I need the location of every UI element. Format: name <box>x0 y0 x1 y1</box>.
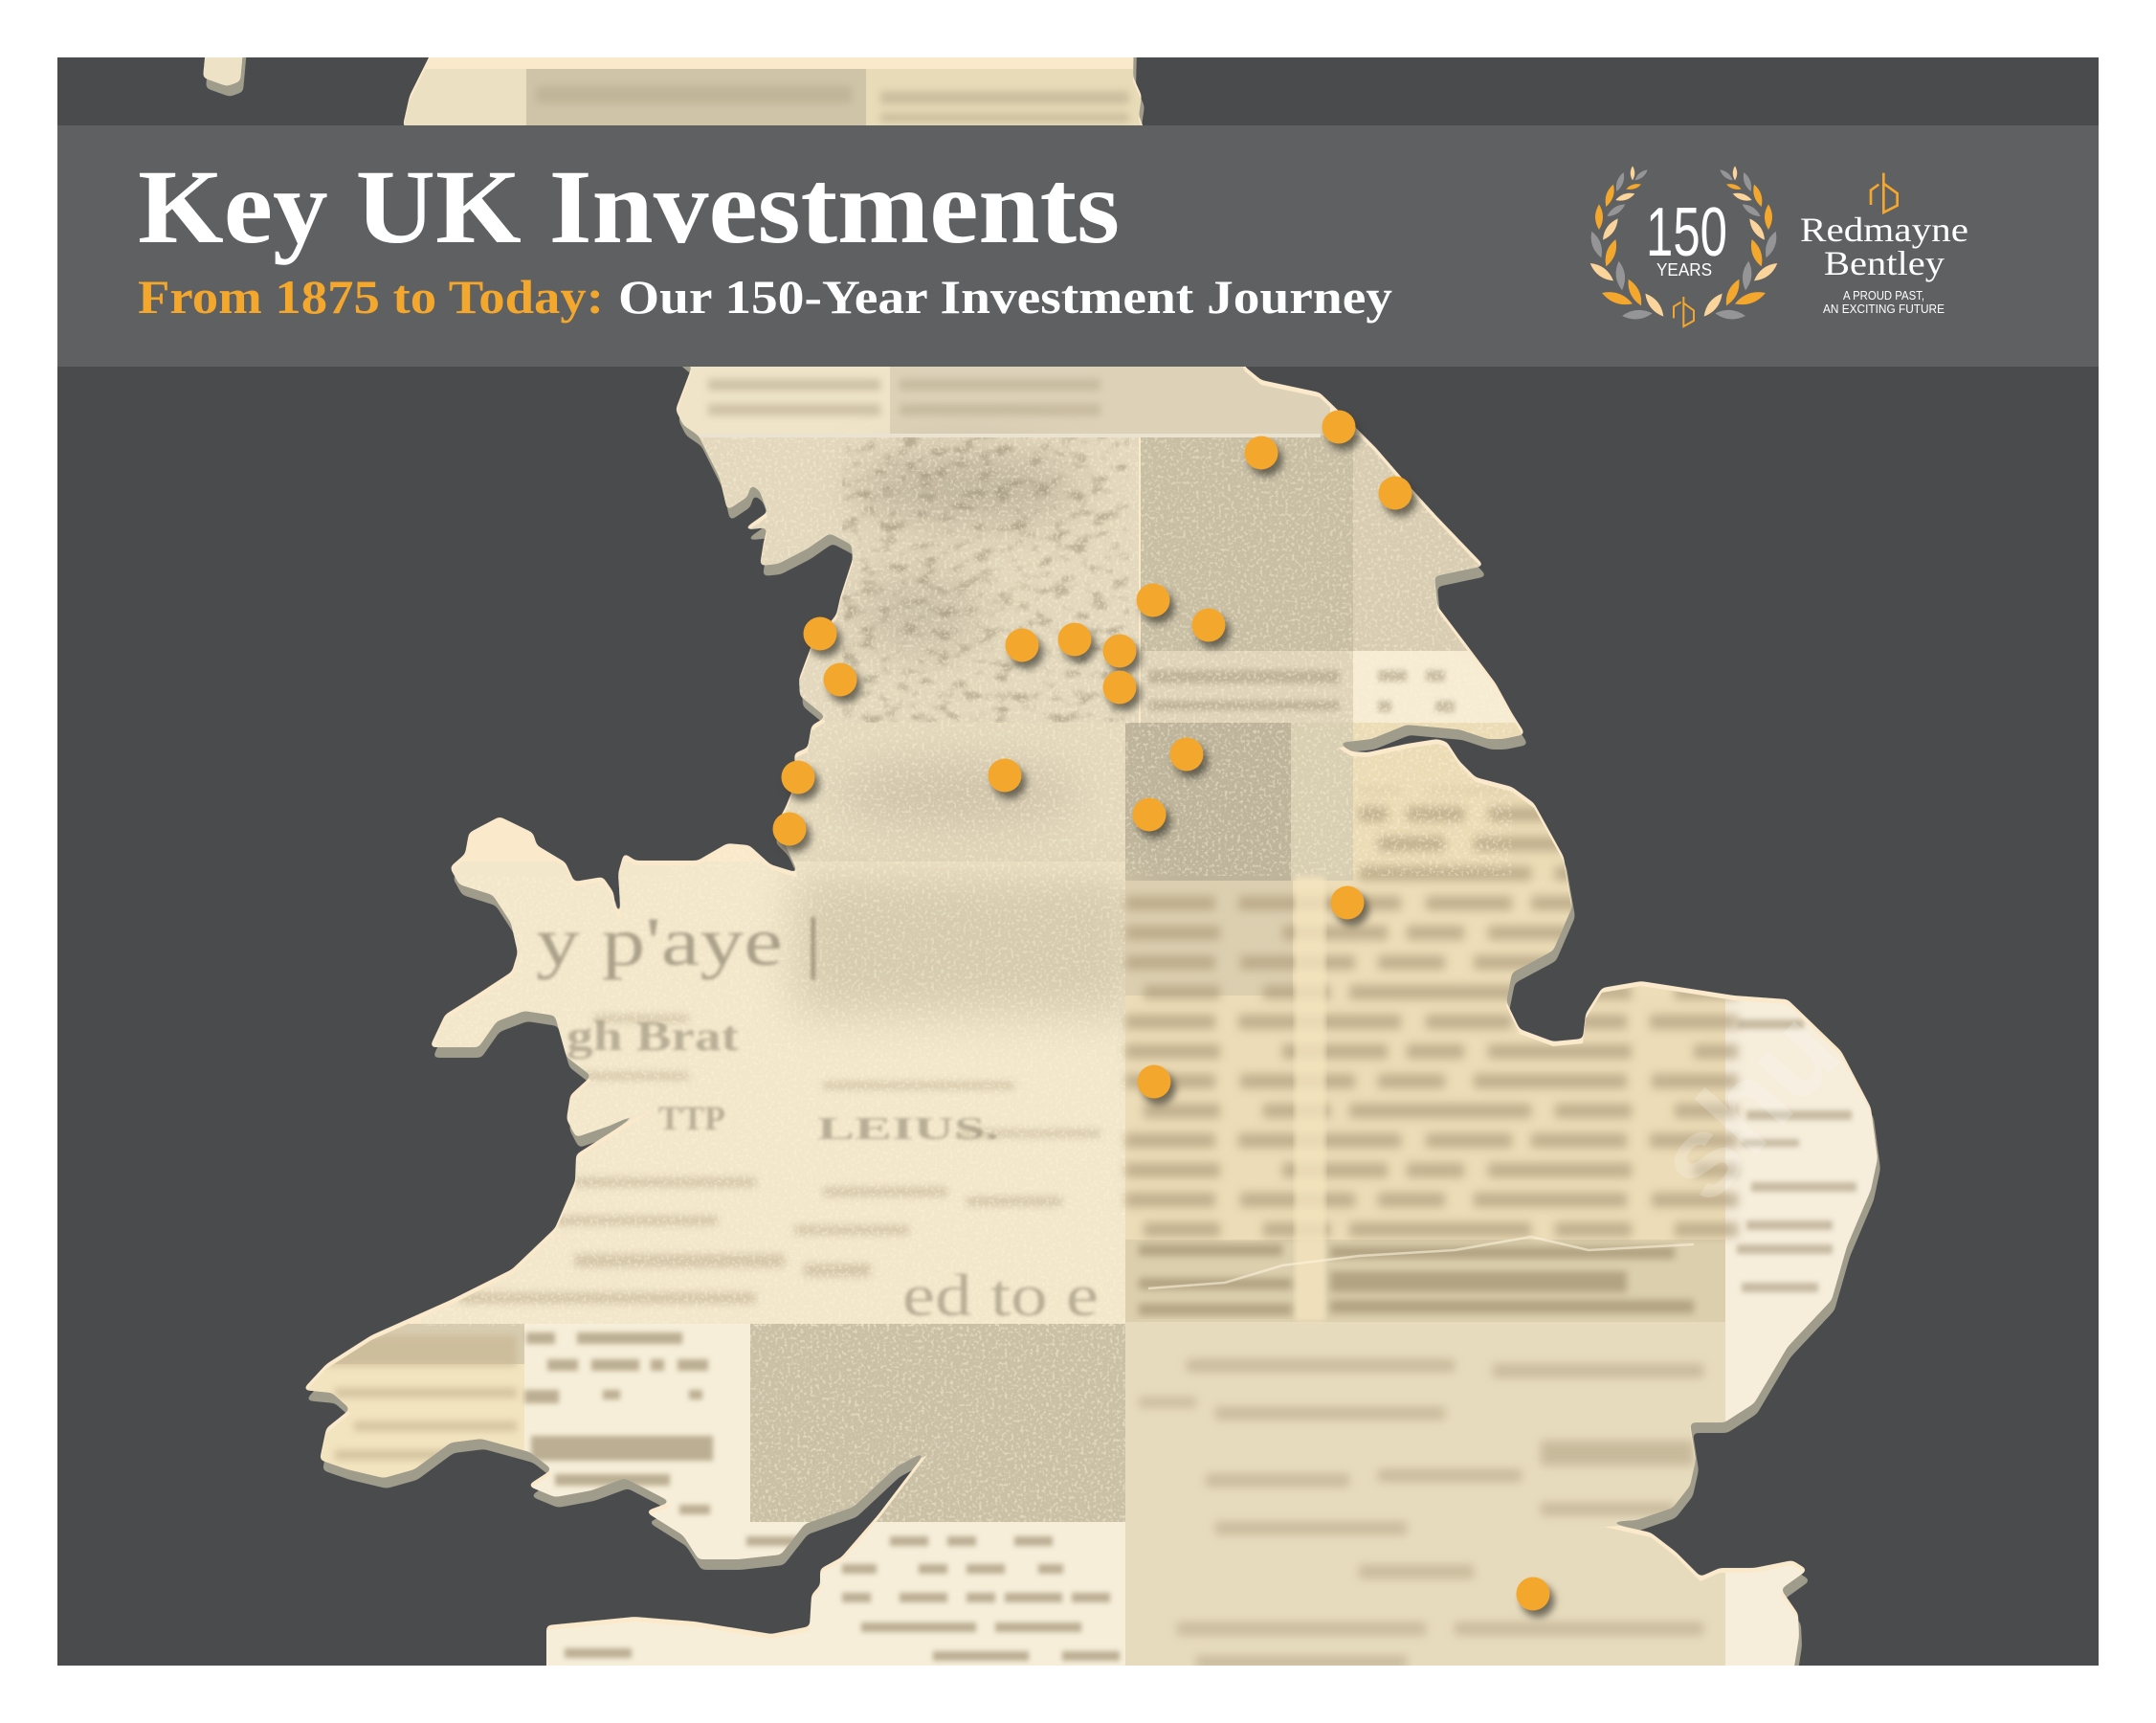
faint lines, east anglia <box>1737 1019 1856 1292</box>
newsprint dashes, south wales <box>524 1332 1120 1661</box>
tagline line two: AN EXCITING FUTURE <box>1823 302 1945 316</box>
ghost newsprint word: ed to e: ed to e <box>902 1264 1099 1329</box>
brand name line one: Redmayne <box>1800 211 1968 249</box>
years label: YEARS <box>1656 260 1712 280</box>
map drop edge <box>206 49 1880 1695</box>
icon: laurel leaves <box>1590 166 1777 326</box>
print speckle north <box>670 436 1512 876</box>
ghost newsprint word: play: y p'aye | <box>536 904 822 980</box>
faint lines, south east <box>1139 1359 1703 1668</box>
map location pins <box>773 410 1550 1610</box>
dark strip lines <box>1139 1244 1694 1315</box>
watermark fragment: shu <box>1632 987 1863 1224</box>
icon: rb monogram <box>1871 173 1898 213</box>
subtitle: date range: From 1875 to Today: <box>138 270 604 324</box>
right laurel branch <box>1704 166 1777 320</box>
logo: Redmayne Bentley <box>1800 173 1968 316</box>
left laurel branch <box>1590 166 1663 320</box>
title: Key UK Investments <box>138 148 1120 265</box>
header band <box>57 125 2099 367</box>
mottled print grain <box>842 436 1129 723</box>
newsprint lines, west wales <box>325 1335 517 1460</box>
blurred text columns <box>1125 790 1738 1240</box>
ghost newsprint word: lei: LEIUS. <box>817 1111 999 1147</box>
newsprint strip with crease <box>1139 1237 1694 1315</box>
tagline line one: A PROUD PAST, <box>1843 289 1924 302</box>
logo: 150 years laurel wreath <box>1590 166 1777 326</box>
white crease <box>1148 1237 1694 1288</box>
map base fill <box>203 38 1878 1685</box>
light vertical column <box>1295 876 1325 1321</box>
ghost newsprint word: ttp: TTP <box>658 1099 725 1137</box>
subtitle: journey: Our 150-Year Investment Journey <box>618 270 1392 324</box>
top newsprint lines <box>536 86 1129 415</box>
print speckle midlands <box>421 876 1125 1326</box>
icon: small rb monogram <box>1674 297 1694 326</box>
150 numeral: 150 <box>1646 194 1727 271</box>
brand name line two: Bentley <box>1824 244 1945 282</box>
fold line <box>699 434 1321 437</box>
newsprint patchwork <box>191 57 1888 1686</box>
map of England and Wales in newsprint texture <box>191 38 1888 1695</box>
strip lines, yorkshire <box>1148 670 1455 712</box>
newsprint lines, mid wales <box>459 1015 1100 1304</box>
ghost newsprint word: brat: gh Brat <box>567 1013 739 1060</box>
dark mottled areas <box>833 454 1081 827</box>
print speckle bristol <box>750 1324 1125 1522</box>
